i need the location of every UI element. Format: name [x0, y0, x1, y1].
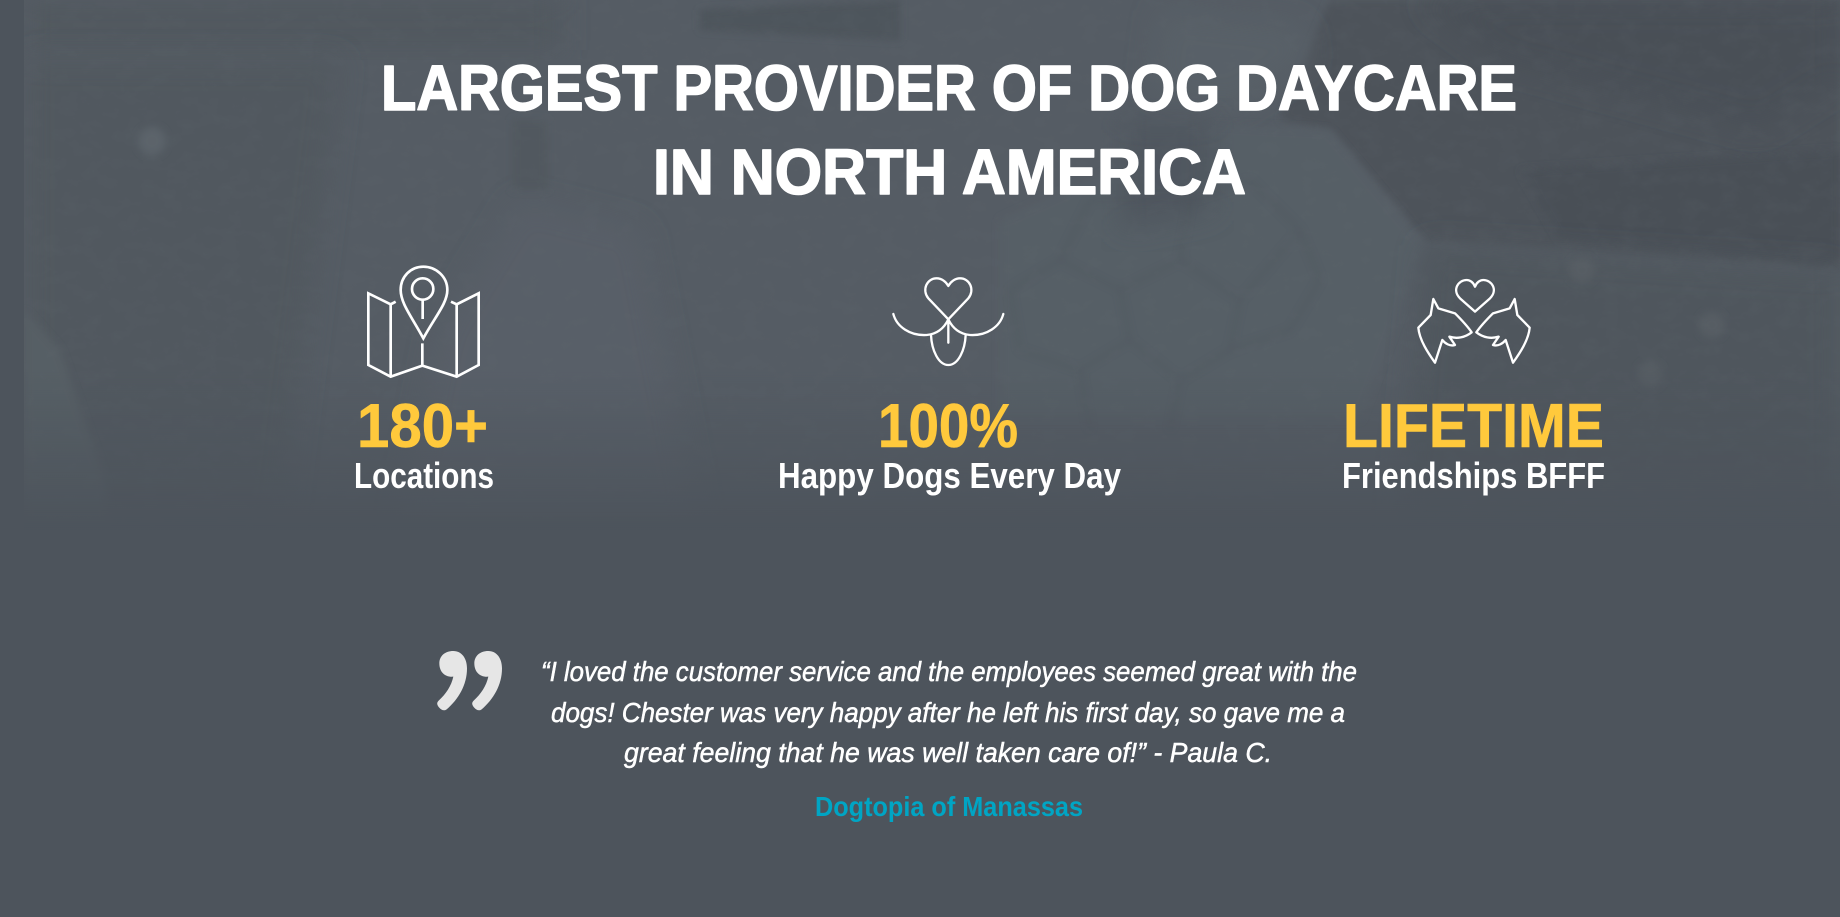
number: lifetime: LIFETIME: [1343, 392, 1604, 461]
icon: folded map with location pin: [368, 267, 479, 377]
icon: heart nose and tongue: [893, 278, 1003, 365]
icon: two dogs and heart: [1418, 280, 1530, 363]
label: locations: Locations: [354, 455, 494, 496]
attribution: location name: Dogtopia of Manassas: [815, 791, 1083, 822]
icon: quotation mark: [437, 651, 502, 710]
label: friendships bfff: Friendships BFFF: [1342, 455, 1605, 496]
quote text: “I loved the customer service and the employees seemed great with the: [541, 656, 1357, 687]
quote text: dogs! Chester was very happy after he left his first day, so gave me a: [551, 697, 1345, 728]
testimonial: [437, 651, 1357, 822]
stat: happy dogs: [778, 278, 1121, 496]
quote text: great feeling that he was well taken care of!” - Paula C.: [624, 737, 1272, 768]
title: [381, 52, 1517, 208]
title: LARGEST PROVIDER OF DOG DAYCARE: [381, 52, 1517, 124]
background: concrete texture: [24, 0, 1722, 428]
stat: locations: [354, 267, 494, 496]
quote text: [541, 656, 1357, 768]
number: 180+: 180+: [357, 392, 488, 461]
title: IN NORTH AMERICA: [653, 136, 1246, 208]
label: happy dogs every day: Happy Dogs Every Day: [778, 455, 1121, 496]
number: 100%: 100%: [878, 392, 1018, 461]
stat: lifetime friendships: [1342, 280, 1605, 496]
